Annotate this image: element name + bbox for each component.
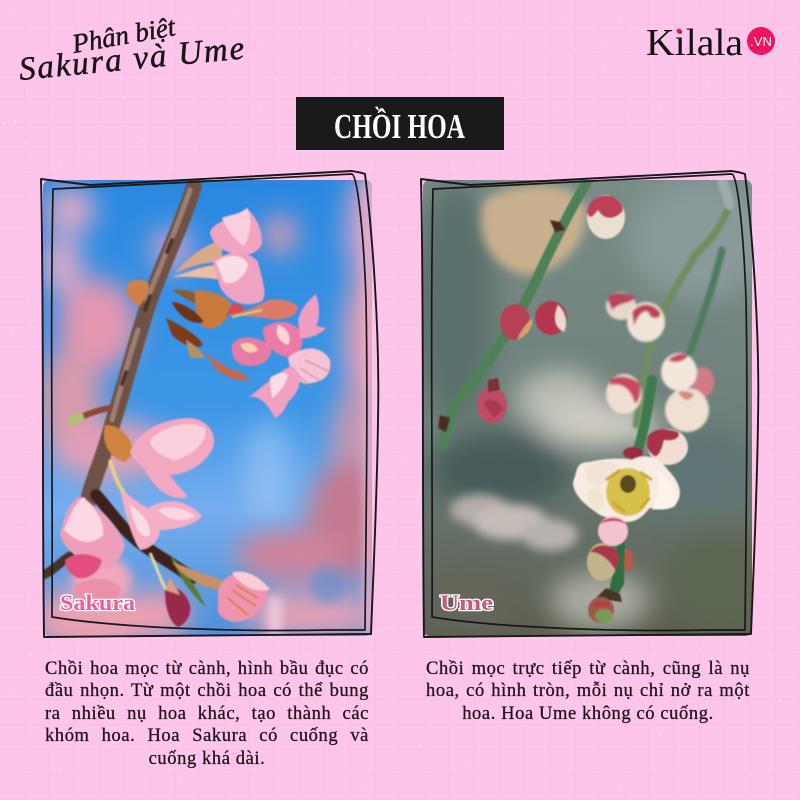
text block: Sakura description: Chồi hoa mọc từ cành, hình bầu đục có [45, 659, 369, 679]
heading: Chồi hoa [296, 97, 504, 150]
heading: Chồi hoa: CHỒI HOA [334, 105, 466, 146]
label: Ume: Ume [440, 590, 493, 615]
sakura flowers upper cluster [127, 208, 330, 418]
panel: Ume photo [415, 180, 770, 636]
ume buds [438, 195, 625, 432]
sakura flowers lower cluster [60, 418, 270, 627]
label: Sakura: Sakura [60, 590, 135, 615]
text block: Ume description: Chồi mọc trực tiếp từ cành, cũng là nụ [426, 659, 750, 679]
text block: Sakura description: ra nhiều nụ hoa khác, tạo thành các [45, 704, 369, 724]
text block: Ume description: hoa. Hoa Ume không có cuống. [462, 704, 714, 724]
text block: Sakura description [45, 659, 369, 769]
text block: Sakura description: đầu nhọn. Từ một chồi hoa có thể bung [45, 681, 369, 701]
panel: Sakura photo [43, 180, 372, 636]
title: Phân biệt Sakura và Ume: Phân biệt [69, 11, 179, 59]
ume branches [443, 180, 730, 592]
ume blossom [573, 456, 680, 522]
text block: Ume description [426, 659, 750, 724]
frame: Ume sketch border [421, 171, 758, 637]
sakura branch [43, 186, 194, 578]
text block: Sakura description: cuống khá dài. [149, 749, 265, 769]
text block: Ume description: hoa, có hình tròn, mỗi nụ chỉ nở ra một [426, 681, 750, 701]
text block: Sakura description: khóm hoa. Hoa Sakura có cuống và [45, 726, 369, 746]
frame: Sakura sketch border [41, 171, 378, 637]
logo: Kilala.vn: .VN [750, 34, 772, 49]
title: Phân biệt Sakura và Ume: Sakura và Ume [17, 30, 246, 88]
logo: Kilala.vn: Kilala [646, 22, 743, 64]
